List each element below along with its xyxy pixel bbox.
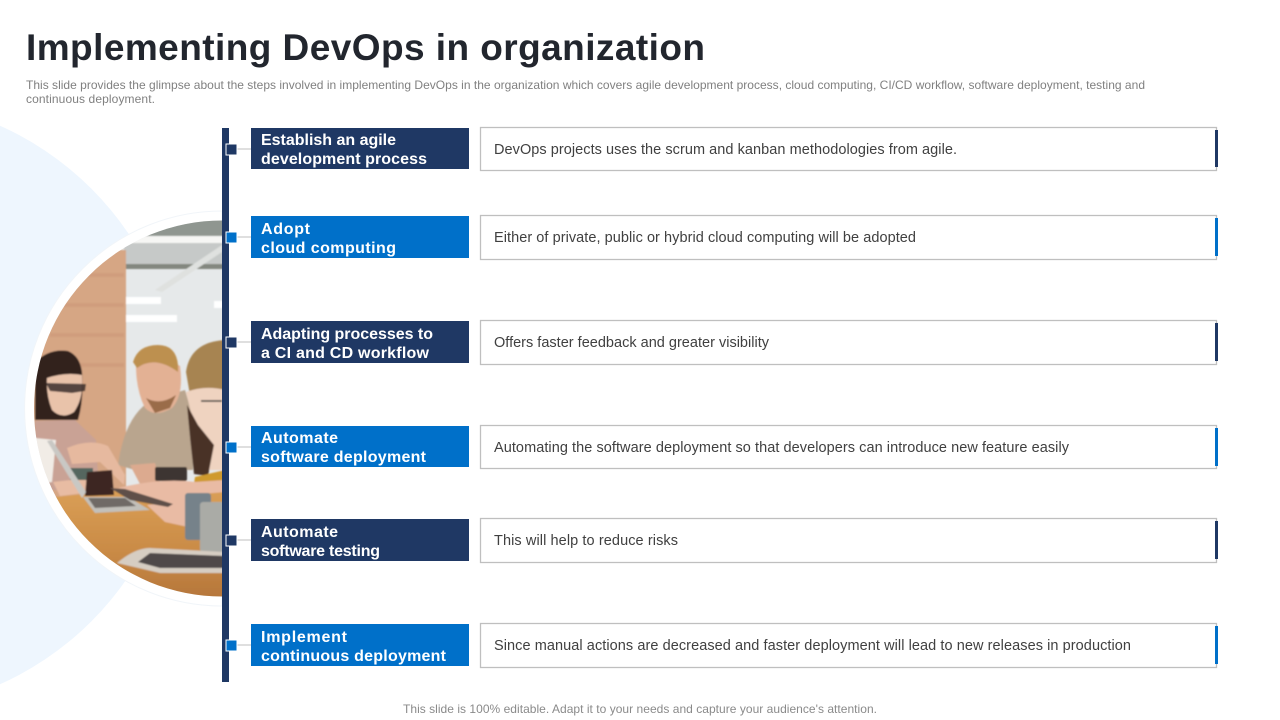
photo ring [25,211,222,606]
table [56,490,222,596]
intro text [26,78,1145,106]
intro text: continuous deployment. [26,92,155,106]
step 2 [226,216,1218,260]
woman left [35,350,82,420]
hands and tablet [118,480,225,527]
step 3 [226,320,1218,364]
phone on table [117,548,225,573]
step 1 [226,128,1218,170]
step 6: Since manual actions are decreased and faster deployment will lead to new releases in production [494,638,1131,654]
step 3: Offers faster feedback and greater visibility [494,335,770,351]
intro text: This slide provides the glimpse about the steps involved in implementing DevOps in the organization which covers agile development process, cloud computing, CI/CD workflow, software deployment, testing and [26,78,1145,92]
step 4: software deployment [261,449,427,466]
laptop [47,440,86,498]
title: Implementing DevOps in organization [26,27,705,68]
background pale circle [0,99,181,711]
step 4 [226,426,1218,468]
step 6: continuous deployment [261,648,447,665]
mug and hands [130,463,160,484]
step 2: cloud computing [261,240,396,257]
step 1: Establish an agile [261,132,396,149]
mugs [185,493,211,540]
step 2: Either of private, public or hybrid cloud computing will be adopted [494,230,916,246]
step 5 [226,518,1218,562]
step 6 [226,624,1218,668]
step 6: Implement [261,629,348,646]
man [118,390,194,470]
step 5: This will help to reduce risks [494,533,678,549]
photo: team around a laptop [30,215,225,600]
step 5: Automate [261,524,338,541]
step 1: development process [261,151,427,168]
step 2: Adopt [261,221,311,238]
timeline spine [222,128,229,682]
step 3: Adapting processes to [261,326,433,343]
step 1: DevOps projects uses the scrum and kanban methodologies from agile. [494,142,957,158]
woman right [185,339,222,392]
step 4: Automating the software deployment so that developers can introduce new feature easily [494,440,1070,456]
step 5: software testing [261,543,380,560]
step 4: Automate [261,430,338,447]
step 3: a CI and CD workflow [261,345,430,362]
footer note: This slide is 100% editable. Adapt it to your needs and capture your audience's attention. [403,702,877,716]
